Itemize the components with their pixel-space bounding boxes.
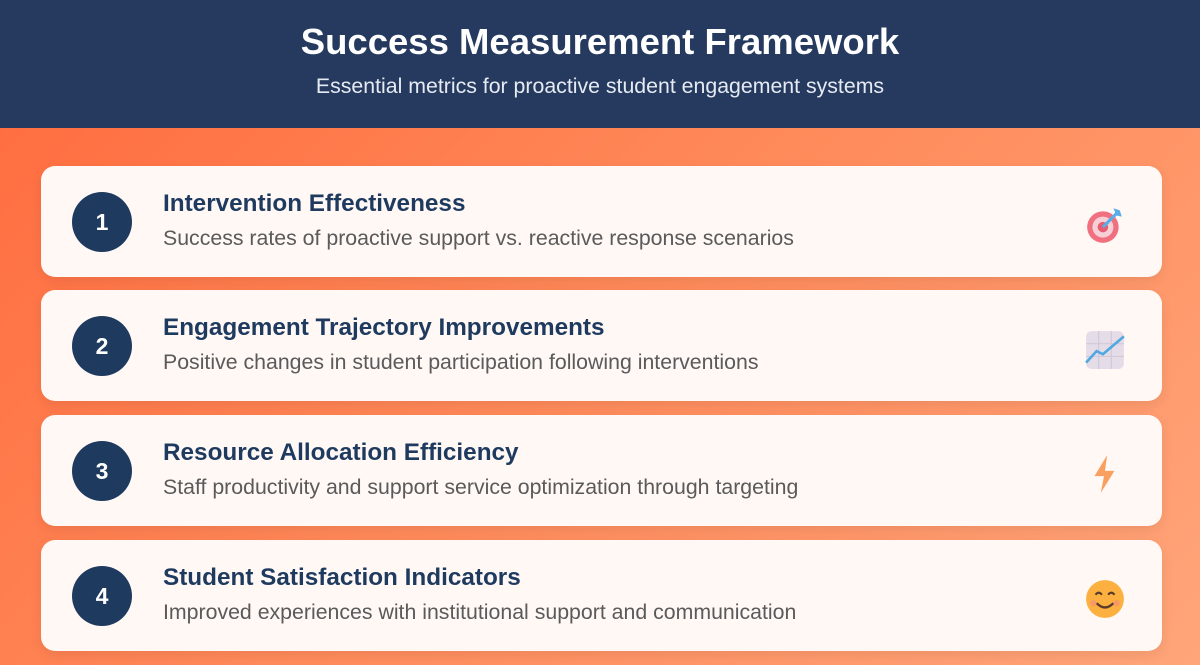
card 4 [41, 540, 1162, 651]
description 3: Staff productivity and support service optimization through targeting [163, 475, 798, 499]
header [0, 0, 1200, 128]
number 3: 3 [96, 458, 108, 484]
subtitle: Essential metrics for proactive student engagement systems [316, 74, 884, 98]
heading 2: Engagement Trajectory Improvements [163, 314, 605, 341]
number 3 [72, 441, 132, 501]
heading 1: Intervention Effectiveness [163, 190, 465, 217]
card 1 [41, 166, 1162, 277]
description 2: Positive changes in student participation following interventions [163, 350, 758, 374]
number 4 [72, 566, 132, 626]
icon: smiley [1086, 580, 1124, 618]
heading 4: Student Satisfaction Indicators [163, 564, 521, 591]
number 1 [72, 192, 132, 252]
title: Success Measurement Framework [301, 21, 899, 62]
description 1: Success rates of proactive support vs. reactive response scenarios [163, 226, 794, 250]
number 2 [72, 316, 132, 376]
number 1: 1 [96, 209, 108, 235]
number 2: 2 [96, 333, 108, 359]
number 4: 4 [96, 583, 108, 609]
card 2 [41, 290, 1162, 401]
heading 3: Resource Allocation Efficiency [163, 439, 519, 466]
card 3 [41, 415, 1162, 526]
icon: target [1087, 208, 1122, 243]
description 4: Improved experiences with institutional support and communication [163, 600, 796, 624]
icon: chart [1085, 331, 1125, 369]
icon: lightning [1094, 455, 1114, 493]
